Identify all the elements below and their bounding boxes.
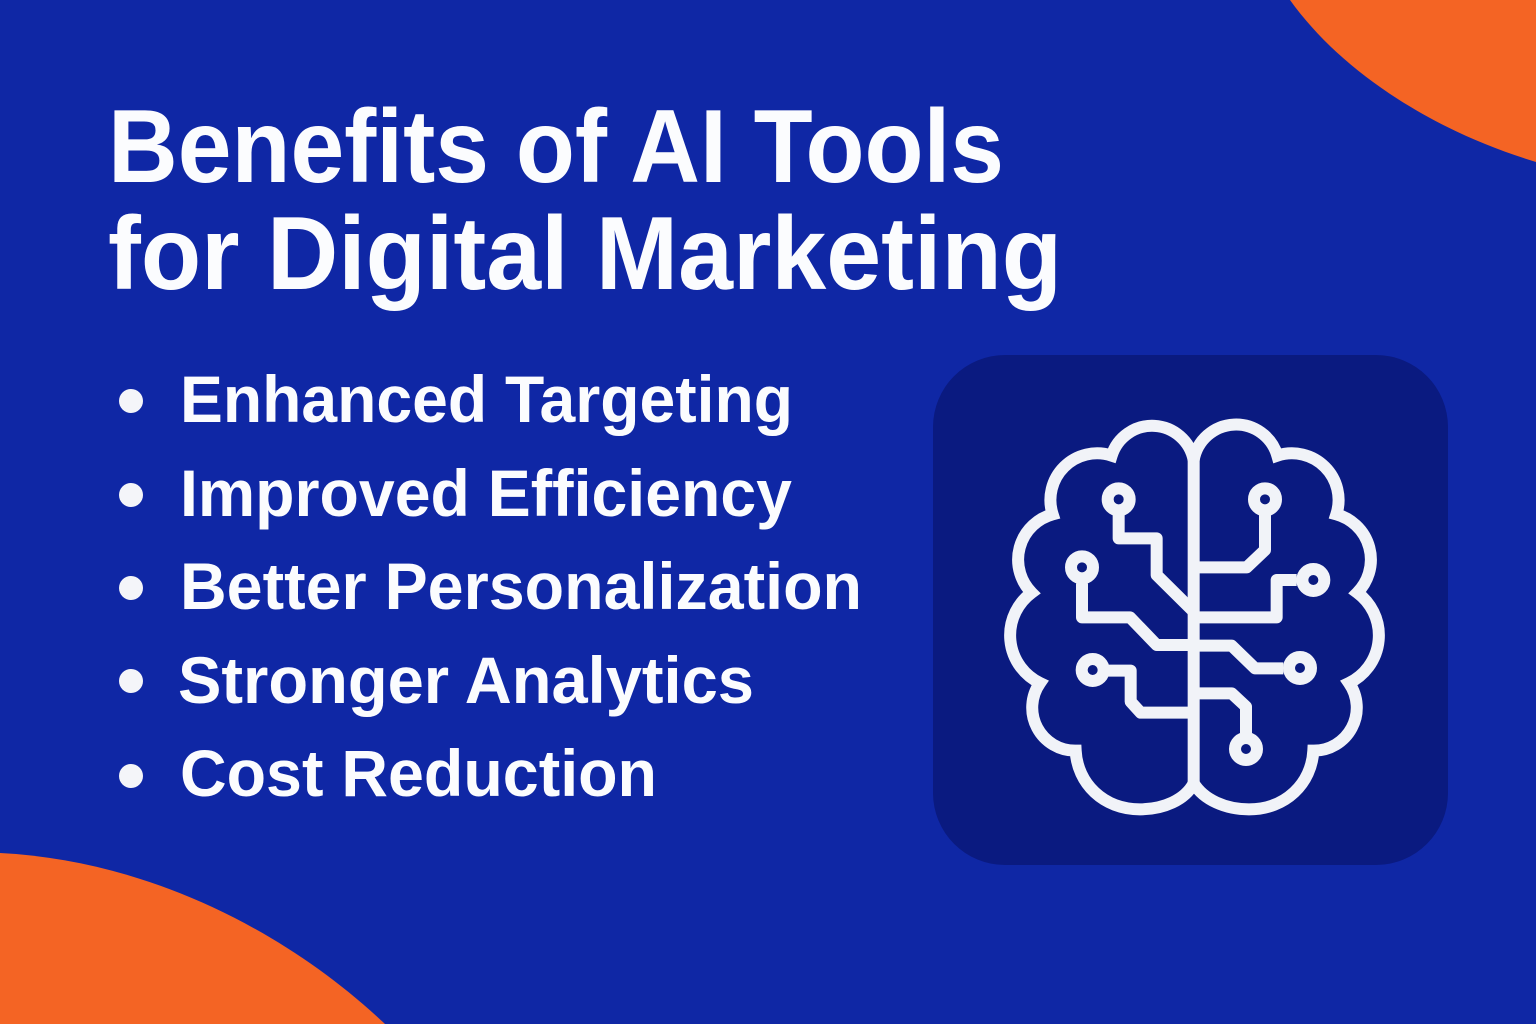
center divider [1176,457,1212,785]
orange corner: top right [1290,0,1536,162]
title [108,89,1062,312]
circuit nodes [1108,488,1130,510]
list item: Cost Reduction: Cost Reduction [180,736,657,810]
benefits list [119,362,862,810]
orange corner: bottom left [0,853,385,1024]
icon: AI brain with circuits [1010,425,1379,809]
brain right outline [1194,425,1379,809]
icon panel [933,355,1448,865]
brain left outline [1010,426,1194,809]
list item: Improved Efficiency: Improved Efficiency [180,456,792,530]
title: Benefits of AI Tools [108,89,1004,205]
title: for Digital Marketing [108,196,1062,312]
list item: Enhanced Targeting: Enhanced Targeting [180,362,793,436]
list item: Stronger Analytics: Stronger Analytics [178,643,754,717]
circuit traces [1119,515,1194,612]
list item: Better Personalization: Better Personalization [180,549,862,623]
